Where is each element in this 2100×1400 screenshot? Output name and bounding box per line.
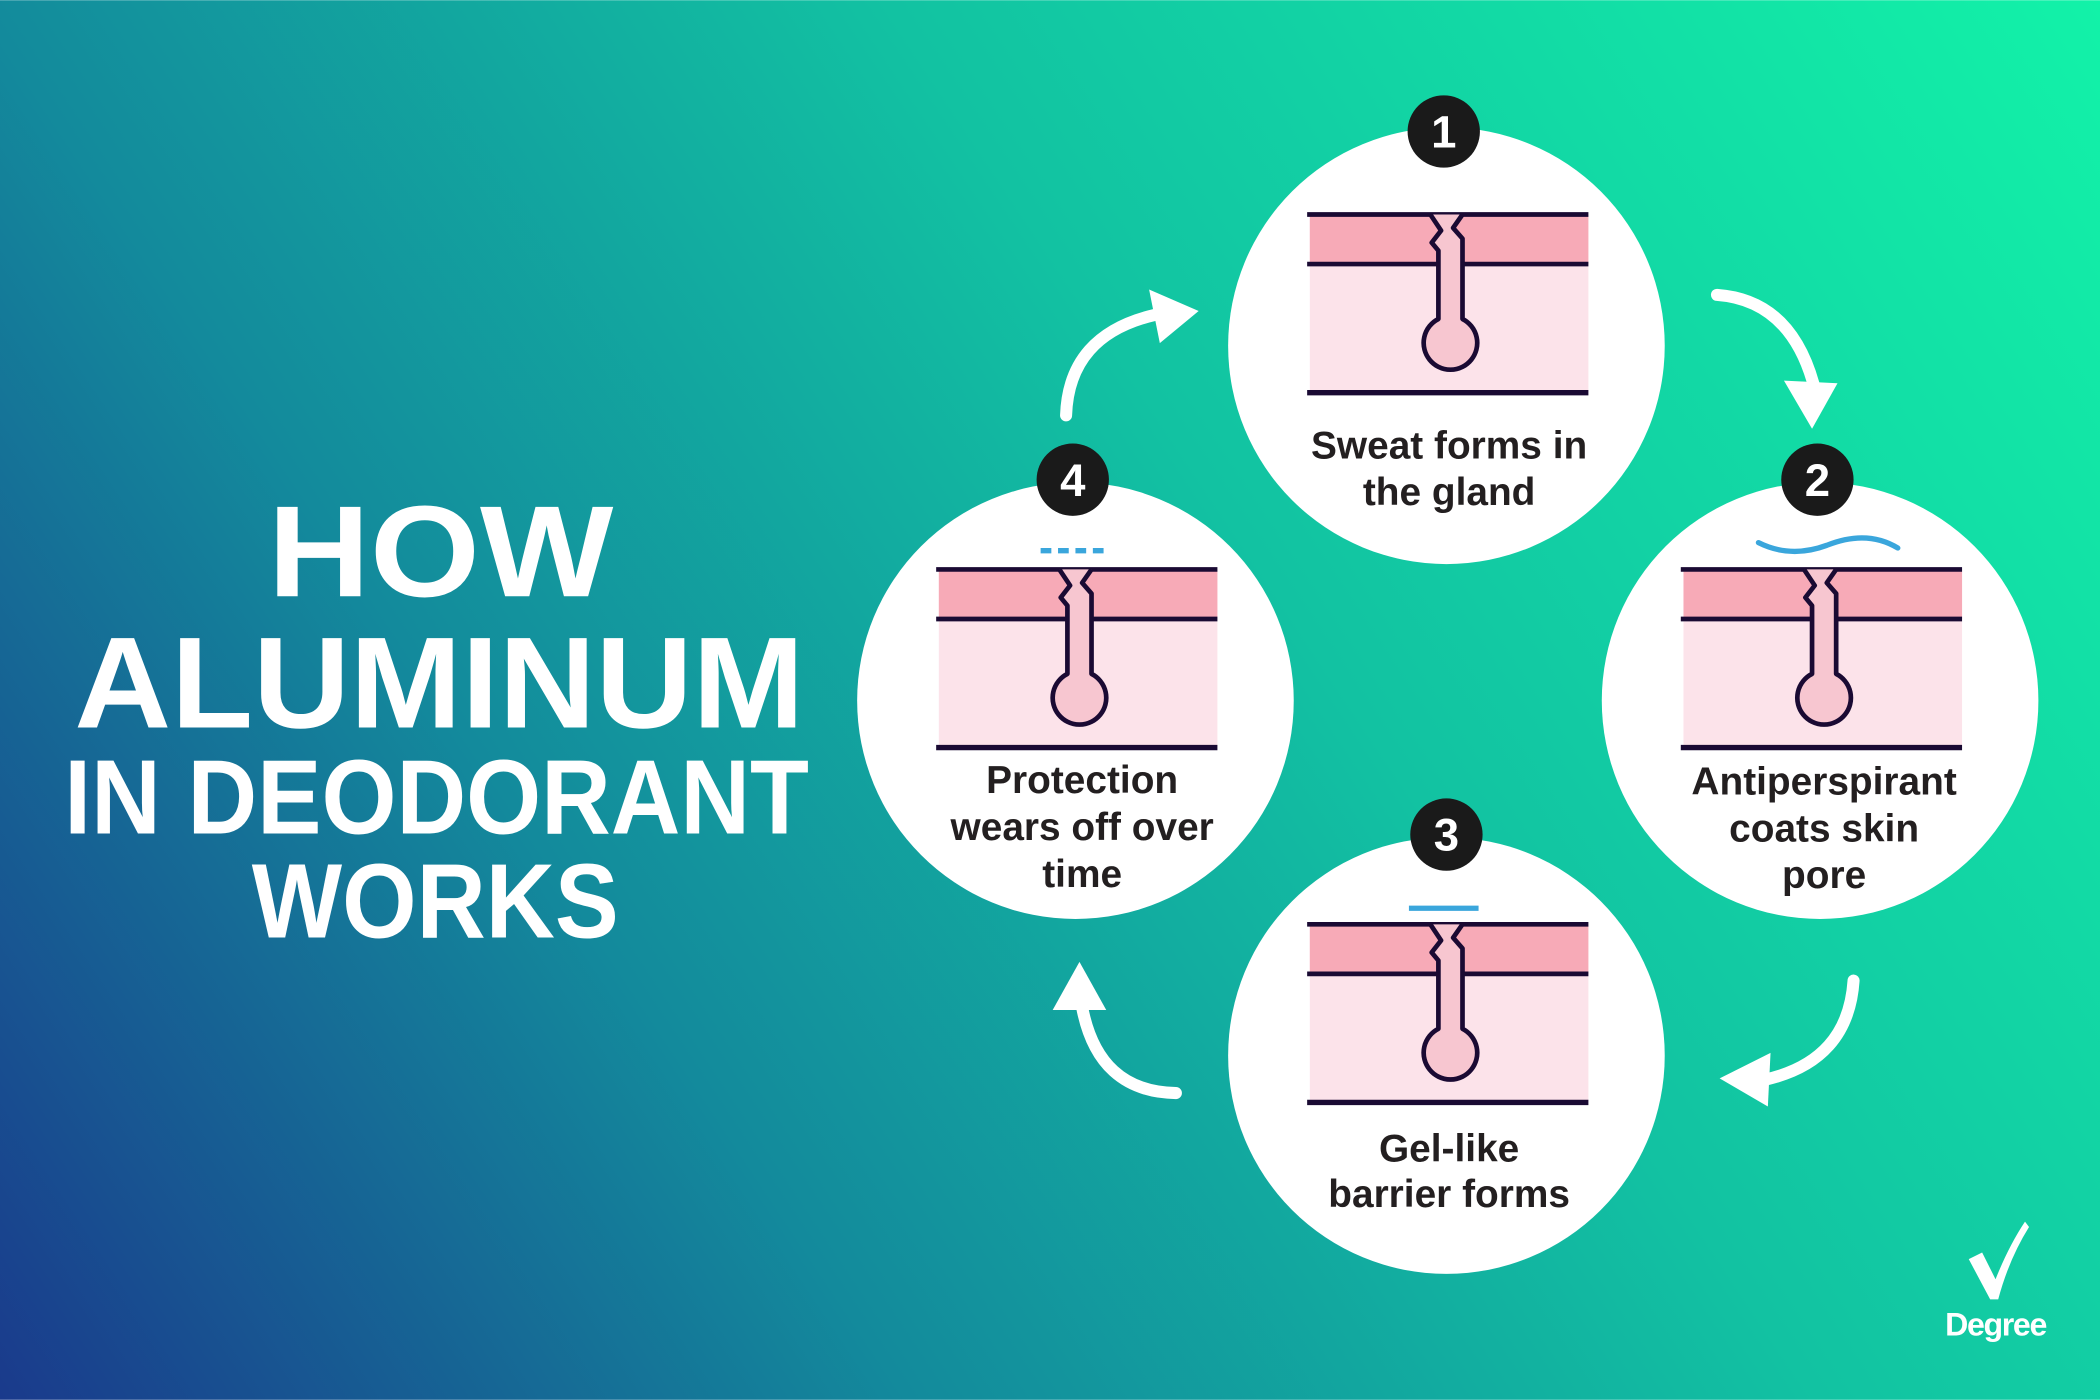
step 2: coats skin — [1729, 807, 1919, 850]
step 3: Gel-like — [1379, 1127, 1519, 1170]
title: IN DEODORANT — [64, 738, 809, 856]
logo — [1945, 1222, 2046, 1342]
step 1: the gland — [1363, 471, 1535, 514]
step 2 — [1602, 444, 2038, 919]
step 2: Antiperspirant — [1691, 760, 1957, 803]
step 1: 1 — [1431, 107, 1456, 158]
step 4: wears off over — [950, 806, 1214, 849]
title: WORKS — [252, 843, 619, 961]
step 4 — [857, 444, 1294, 919]
title — [64, 478, 809, 961]
step 3 — [1228, 798, 1665, 1274]
logo: Degree — [1945, 1306, 2046, 1342]
arrows — [1066, 295, 1854, 1093]
step 2: 2 — [1805, 455, 1830, 506]
step 4: 4 — [1060, 455, 1086, 506]
step 1: Sweat forms in — [1311, 424, 1587, 467]
title: ALUMINUM — [74, 609, 804, 755]
step 3: barrier forms — [1328, 1173, 1570, 1216]
step 3: 3 — [1434, 810, 1459, 861]
step 2: pore — [1782, 854, 1866, 897]
title: HOW — [268, 478, 614, 624]
step 1 — [1228, 95, 1665, 564]
step 4: time — [1042, 853, 1122, 896]
step 4: Protection — [986, 759, 1178, 802]
